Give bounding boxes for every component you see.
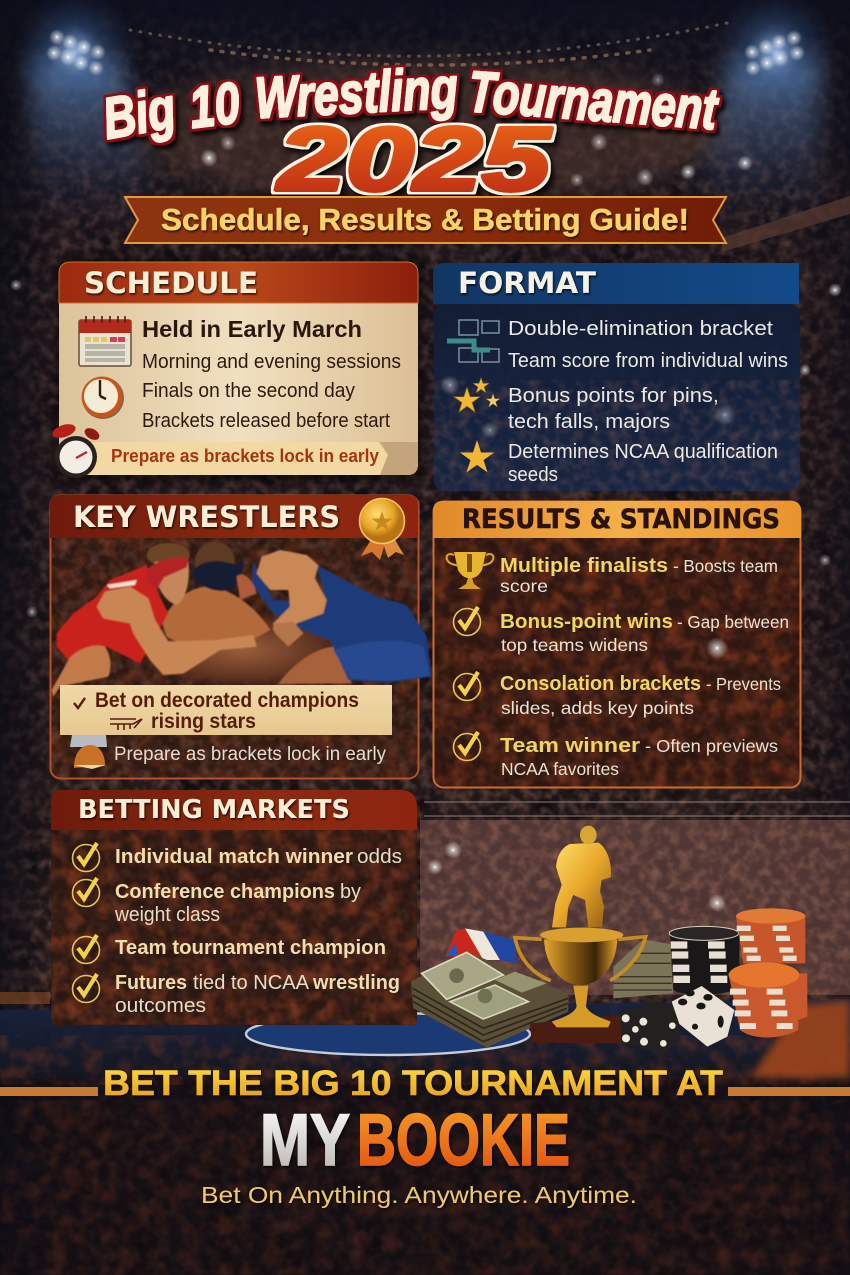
- wrestlers body: [50, 537, 419, 779]
- betting items: Futures: [115, 972, 187, 994]
- betting heading: BETTING MARKETS: [78, 795, 350, 825]
- betting items: outcomes: [115, 995, 206, 1017]
- red wrestler head: [147, 543, 190, 567]
- format heading: FORMAT: [458, 266, 596, 300]
- format text: Bonus points for pins,: [508, 384, 719, 407]
- red wrestler leg: [52, 645, 111, 697]
- logo: mybookie: BOOKIE: [357, 1100, 570, 1181]
- icon: alarm clock: [51, 422, 101, 478]
- icon: bracket: [447, 320, 499, 362]
- betting items: weight class: [114, 904, 220, 926]
- hands: [273, 622, 303, 647]
- result items: Multiple finalists: [500, 555, 668, 577]
- result items: - Boosts team: [673, 556, 778, 576]
- icon: wrestling shoe: [70, 735, 107, 769]
- format text: Determines NCAA qualification: [508, 440, 778, 463]
- blue wrestler leg: [278, 647, 352, 684]
- ribbon: [445, 928, 517, 963]
- format text: Team score from individual wins: [508, 349, 788, 372]
- result items: Bonus-point wins: [500, 611, 673, 633]
- callout: champions: rising stars: [151, 710, 256, 733]
- schedule text: Brackets released before start: [142, 410, 390, 432]
- panel: betting markets: [51, 790, 417, 1025]
- wooden base: [530, 1015, 623, 1043]
- wrestlers illustration: [52, 542, 432, 697]
- red wrestler singlet: [57, 565, 168, 663]
- icon: clock: [82, 376, 124, 419]
- format text: [508, 317, 788, 486]
- betting body: [51, 829, 417, 1025]
- arena floor: [0, 992, 850, 1085]
- format header: [433, 263, 799, 304]
- wrestlers heading: KEY WRESTLERS: [73, 500, 340, 534]
- blue wrestler arm and shoulder: [257, 550, 327, 642]
- wrestlers note: Prepare as brackets lock in early: [114, 744, 386, 765]
- icon: three stars: [454, 378, 500, 412]
- subtitle ribbon: [125, 197, 726, 243]
- title: Wrestling: [253, 55, 459, 131]
- results body: [433, 537, 801, 788]
- result items: score: [500, 576, 548, 596]
- results heading: RESULTS & STANDINGS: [462, 504, 780, 535]
- result items: NCAA favorites: [501, 759, 619, 779]
- schedule header: [59, 262, 418, 303]
- tagline: Bet On Anything. Anywhere. Anytime.: [201, 1182, 637, 1208]
- logo: mybookie: [260, 1100, 570, 1181]
- callout: champions: Bet on decorated champions: [95, 689, 359, 712]
- white die: [672, 986, 734, 1047]
- red headgear: [147, 558, 189, 590]
- format text: seeds: [508, 463, 558, 486]
- orange chips upper: [736, 908, 805, 963]
- betting items: [72, 843, 402, 1017]
- result items: Consolation brackets: [500, 673, 701, 695]
- stadium lights: [13, 0, 837, 220]
- schedule callout strip: [85, 442, 418, 475]
- schedule text: Held in Early March: [142, 316, 362, 342]
- result items: - Prevents: [706, 674, 781, 694]
- schedule heading: SCHEDULE: [84, 266, 258, 300]
- betting header: [51, 790, 417, 830]
- title: [98, 55, 721, 152]
- schedule body: [59, 303, 418, 475]
- schedule text: [142, 316, 401, 432]
- format body: [433, 304, 800, 491]
- title: Big: [98, 75, 180, 152]
- result items: top teams widens: [501, 635, 648, 655]
- betting items: tied to NCAA: [193, 972, 310, 994]
- wrestlers header: [50, 495, 418, 538]
- panel: format: [433, 263, 800, 491]
- blue wrestler head: [195, 542, 235, 582]
- crowd backdrop behind prizes: [420, 802, 850, 995]
- orange chips lower: [728, 962, 807, 1037]
- trophy: [515, 826, 646, 1027]
- red wrestler arm: [97, 587, 257, 675]
- panel: schedule: [51, 258, 423, 482]
- logo: mybookie: MY: [260, 1100, 350, 1181]
- subtitle ribbon: Schedule, Results & Betting Guide!: [161, 202, 689, 237]
- back cash: [613, 939, 673, 998]
- opponent torso: [162, 587, 270, 647]
- black chips: [669, 926, 739, 995]
- schedule text: Morning and evening sessions: [142, 351, 401, 373]
- title: Tournament: [466, 59, 721, 142]
- cash stack: [411, 952, 568, 1047]
- call to action: BET THE BIG 10 TOURNAMENT AT: [103, 1064, 723, 1103]
- title: 10: [186, 70, 243, 141]
- prizes illustration: [411, 826, 807, 1052]
- blue wrestler singlet: [252, 562, 432, 683]
- icon: medal: [360, 498, 404, 560]
- betting items: Individual match winner: [115, 846, 353, 868]
- betting items: wrestling: [312, 972, 400, 994]
- betting items: odds: [357, 846, 402, 868]
- icon: calendar: [79, 316, 131, 366]
- year 2025: 2025: [275, 110, 553, 210]
- betting items: Team tournament champion: [115, 937, 386, 959]
- panel: results and standings: [433, 501, 801, 788]
- result items: slides, adds key points: [501, 698, 694, 718]
- icon: trophy: [447, 552, 493, 589]
- betting items: Conference champions: [115, 881, 335, 903]
- schedule callout strip: Prepare as brackets lock in early: [111, 446, 379, 466]
- results header: [433, 501, 801, 538]
- schedule text: Finals on the second day: [142, 380, 355, 402]
- betting items: by: [340, 881, 361, 903]
- result items: - Gap between: [677, 612, 789, 632]
- callout: champions: [60, 685, 392, 735]
- crowd flash highlights: [10, 73, 842, 618]
- mat glow: [133, 610, 353, 690]
- result items: - Often previews: [645, 736, 778, 756]
- panel: key wrestlers: [50, 495, 432, 779]
- format text: Double-elimination bracket: [508, 317, 773, 340]
- footer band: [0, 1087, 850, 1096]
- result items: [454, 555, 789, 779]
- result items: Team winner: [500, 735, 640, 757]
- format text: tech falls, majors: [508, 410, 670, 433]
- icon: star: [460, 440, 494, 473]
- black die: [620, 1001, 679, 1052]
